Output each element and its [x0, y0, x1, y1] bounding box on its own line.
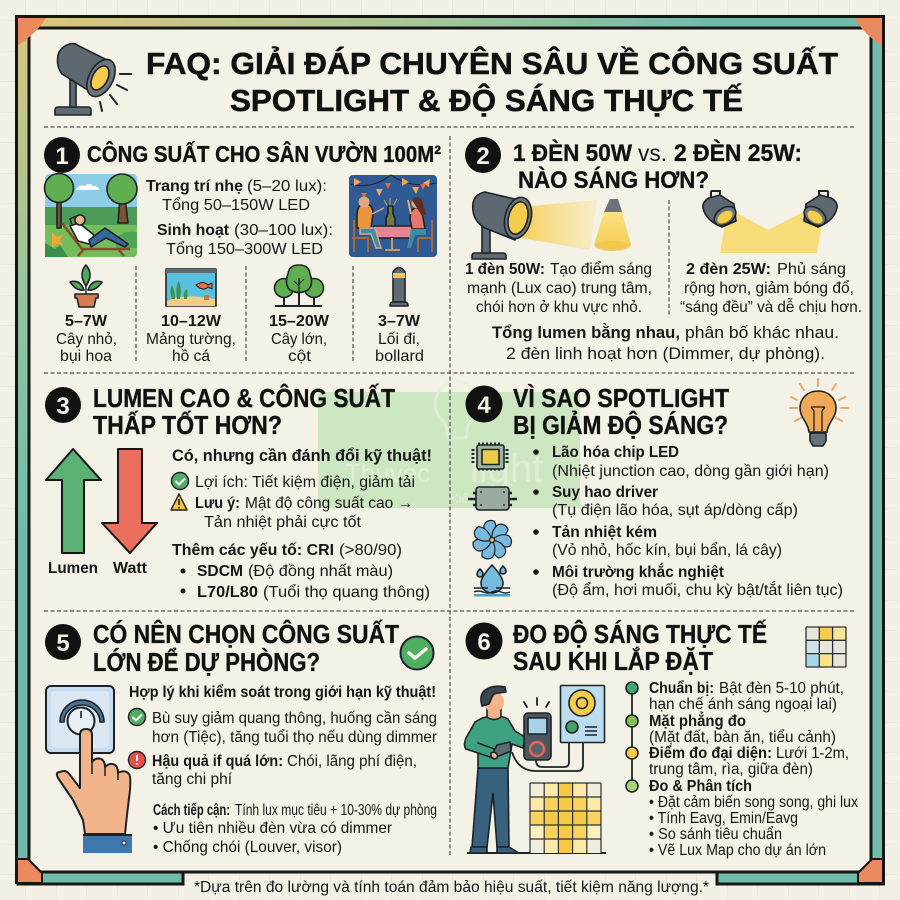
panel: 1 đèn 50W vs 2 đèn 25W	[465, 137, 862, 363]
badge 3: 3	[56, 393, 70, 420]
caution row: Lưu ý:	[195, 495, 240, 512]
illustration: garden relaxing	[44, 174, 137, 257]
step: measuring points: Điểm đo đại diện:	[649, 745, 772, 762]
illustration: focused cone	[594, 199, 631, 251]
badge 4: 4	[477, 392, 491, 419]
badge 5	[45, 624, 81, 660]
text: living use: (30–100 lux):	[234, 222, 333, 239]
step: measure and analyse: • Tính Eavg, Emin/Eavg	[649, 810, 798, 827]
title: SPOTLIGHT & ĐỘ SÁNG THỰC TẾ	[230, 82, 743, 118]
heading 4	[513, 384, 729, 440]
heading 4: BỊ GIẢM ĐỘ SÁNG?	[513, 410, 728, 440]
icon: water drop	[474, 565, 510, 596]
item: wall and aquarium: Mảng tường,	[146, 331, 236, 348]
text: 2 đèn 25W: “sáng đều” và dễ chịu hơn.	[680, 297, 862, 316]
heading 6	[513, 619, 767, 676]
badge 1	[44, 137, 80, 173]
heading 3: LUMEN CAO & CÔNG SUẤT	[93, 383, 395, 413]
panel: công suất cho sân vườn	[44, 137, 441, 365]
heading 3	[93, 383, 395, 440]
text: light decorative	[146, 178, 327, 214]
icon: header spotlight	[55, 44, 131, 115]
heading 2: NÀO SÁNG HƠN?	[518, 166, 709, 194]
panel: vì sao spotlight giảm độ sáng	[466, 379, 848, 599]
badge 3	[45, 387, 81, 423]
text: 2 đèn 25W	[680, 261, 862, 316]
heading 6: SAU KHI LẮP ĐẶT	[513, 646, 713, 676]
step: measuring plane: Mặt phẳng đo	[649, 712, 746, 730]
benefit row	[128, 708, 438, 746]
badge 6	[466, 622, 502, 660]
illustration: party dining	[349, 175, 437, 257]
watt column dividers	[136, 266, 353, 363]
heading 2: 1 ĐÈN 50W	[513, 139, 632, 167]
title: FAQ: GIẢI ĐÁP CHUYÊN SÂU VỀ CÔNG SUẤT	[146, 45, 838, 81]
heading 6: ĐO ĐỘ SÁNG THỰC TẾ	[513, 619, 767, 649]
title	[146, 45, 838, 118]
subheading: Có, nhưng cần đánh đổi kỹ thuật!	[172, 446, 432, 465]
extra factors list: (>80/90)	[339, 542, 402, 559]
badge 2	[465, 137, 501, 173]
watermark	[318, 382, 580, 508]
item: pathway bollard: 3–7W	[378, 313, 421, 330]
icon: red watt arrow	[102, 449, 157, 577]
approach list: Cách tiếp cận:	[153, 802, 230, 819]
reason: driver loss: Suy hao driver	[552, 484, 658, 501]
item: pathway bollard: Lối đi,	[378, 331, 420, 348]
item: pathway bollard: bollard	[375, 348, 424, 365]
illustration: dimmer and hand	[46, 686, 132, 853]
icon: driver	[468, 487, 517, 510]
step: preparation: Bật đèn 5-10 phút,	[719, 680, 844, 697]
step: measuring points: trung tâm, rìa, giữa đèn)	[649, 761, 813, 778]
step: measuring points	[649, 745, 849, 778]
text: light decorative: (5–20 lux):	[247, 178, 327, 195]
panel: lumen cao và công suất thấp	[45, 383, 432, 601]
heading 5	[93, 619, 399, 677]
text: 1 đèn 50W: chói hơn ở khu vực nhỏ.	[476, 299, 642, 316]
item: pathway bollard	[375, 268, 424, 365]
panel: có nên chọn công suất lớn	[45, 619, 438, 856]
heading 3: THẤP TỐT HƠN?	[93, 410, 282, 440]
extra factors list: (Tuổi thọ quang thông)	[263, 583, 430, 601]
text: 1 đèn 50W: mạnh (Lux cao) trung tâm,	[467, 280, 652, 297]
reason: poor heat dissipation	[533, 524, 782, 559]
extra factors list	[172, 542, 430, 601]
icon: lux grid	[806, 627, 846, 667]
reason: driver loss	[533, 484, 798, 519]
illustration: two 25W spotlights	[703, 191, 837, 253]
badge 5: 5	[56, 630, 70, 657]
heading 2	[513, 139, 802, 194]
text: light decorative: Tổng 50–150W LED	[162, 196, 310, 214]
reason: harsh environment	[533, 562, 843, 599]
heading 5: LỚN ĐỂ DỰ PHÒNG?	[93, 647, 320, 677]
reason: harsh environment: (Độ ẩm, hơi muối, chu kỳ bật/tắt liên tục)	[552, 580, 843, 599]
extra factors list: (Độ đồng nhất màu)	[248, 563, 393, 580]
item: small plants: bụi hoa	[60, 348, 112, 365]
reason: poor heat dissipation: Tản nhiệt kém	[552, 524, 657, 541]
summary text: Tổng lumen bằng nhau,	[492, 323, 680, 342]
panel: đo độ sáng thực tế	[464, 619, 858, 859]
badge 1: 1	[55, 143, 69, 170]
badge 6: 6	[477, 629, 491, 656]
illustration: technician with lux meter	[464, 686, 606, 853]
item: small plants	[56, 265, 117, 365]
caution row	[171, 494, 413, 531]
icon: green lumen arrow: Lumen	[48, 560, 98, 577]
text: living use: Sinh hoạt	[157, 222, 230, 239]
item: small plants: Cây nhỏ,	[56, 331, 117, 348]
step: measure and analyse: • Đặt cảm biến song song, ghi lux	[649, 794, 858, 811]
item: wall and aquarium	[146, 269, 236, 365]
reason: LED chip aging: Lão hóa chip LED	[552, 444, 679, 461]
step: preparation: Chuẩn bị:	[649, 680, 714, 697]
step: measuring plane	[649, 712, 836, 746]
text: 2 đèn 25W: Phủ sáng	[777, 261, 846, 278]
item: wall and aquarium: hồ cá	[172, 348, 210, 365]
item: large trees	[269, 265, 330, 365]
step: measure and analyse: • So sánh tiêu chuẩn	[649, 826, 782, 843]
item: large trees: 15–20W	[269, 313, 330, 330]
step: measure and analyse	[649, 778, 858, 859]
icon: red watt arrow: Watt	[113, 560, 148, 577]
step: preparation	[649, 680, 844, 713]
caution row: Mật độ công suất cao →	[245, 495, 413, 512]
consequence row: Chói, lãng phí điện,	[287, 753, 417, 770]
text: light decorative: Trang trí nhẹ	[146, 178, 243, 195]
step: measure and analyse: • Vẽ Lux Map cho dự án lớn	[649, 842, 826, 859]
reason: LED chip aging	[533, 444, 829, 480]
icon: large check	[400, 636, 434, 670]
extra factors list: SDCM	[197, 563, 243, 580]
benefit row: Lợi ích: Tiết kiệm điện, giảm tải	[195, 474, 415, 491]
step: measuring plane: (Mặt đất, bàn ăn, tiểu cảnh)	[649, 729, 836, 746]
caution row: Tản nhiệt phải cực tốt	[204, 514, 362, 531]
summary text: phân bố khác nhau.	[685, 323, 839, 342]
watermark: light	[470, 447, 543, 491]
summary text	[492, 323, 839, 363]
badge 2: 2	[476, 143, 490, 170]
benefit row: Bù suy giảm quang thông, huống cần sáng	[152, 710, 437, 727]
reason: harsh environment: Môi trường khắc nghiệt	[552, 562, 725, 581]
illustration: single 50W spotlight beam	[472, 192, 597, 259]
badge 4	[466, 386, 502, 422]
approach list	[153, 802, 437, 856]
item: wall and aquarium: 10–12W	[161, 313, 222, 330]
step: measuring points: Lưới 1-2m,	[776, 745, 849, 762]
divider	[668, 200, 670, 315]
heading 4: VÌ SAO SPOTLIGHT	[513, 384, 729, 413]
dividers	[44, 127, 855, 855]
consequence row: Hậu quả if quá lớn:	[152, 753, 283, 770]
text: 2 đèn 25W: rộng hơn, giảm bóng đổ,	[684, 279, 854, 297]
watermark: Thuvec	[345, 458, 430, 488]
heading 2: 2 ĐÈN 25W:	[674, 139, 802, 167]
reason: LED chip aging: (Nhiệt junction cao, dòng gần giới hạn)	[552, 463, 829, 480]
icon: LED chip	[473, 444, 507, 469]
approach list: • Ưu tiên nhiều đèn vừa có dimmer	[153, 820, 393, 837]
consequence row: tăng chi phí	[152, 771, 233, 788]
text: living use	[157, 222, 333, 258]
icon: green lumen arrow	[46, 449, 101, 577]
text: 1 đèn 50W: 1 đèn 50W:	[465, 261, 545, 278]
consequence row	[128, 752, 417, 788]
heading 1: CÔNG SUẤT CHO SÂN VƯỜN 100M²	[87, 140, 441, 167]
reason: poor heat dissipation: (Vỏ nhỏ, hốc kín, bụi bẩn, lá cây)	[552, 541, 782, 559]
benefit row: hơn (Tiệc), tăng tuổi thọ nếu dùng dimmer	[152, 728, 438, 746]
icon: cooling fan	[472, 520, 513, 561]
item: large trees: Cây lớn,	[271, 331, 327, 348]
subheading: Hợp lý khi kiểm soát trong giới hạn kỹ thuật!	[129, 683, 436, 701]
approach list: • Chống chói (Louver, visor)	[153, 839, 342, 856]
footer note: *Dựa trên đo lường và tính toán đảm bảo hiệu suất, tiết kiệm năng lượng.*	[194, 879, 709, 896]
timeline	[626, 682, 638, 792]
extra factors list: Thêm các yếu tố: CRI	[172, 542, 334, 559]
text: 2 đèn 25W: 2 đèn 25W:	[686, 261, 771, 278]
item: small plants: 5–7W	[65, 313, 108, 330]
text: 1 đèn 50W: Tạo điểm sáng	[550, 260, 652, 278]
watermark: Kiến thức	[450, 491, 506, 506]
item: large trees: cột	[288, 348, 312, 365]
icon: light bulb	[790, 379, 848, 446]
illustration: lux map floor grid	[530, 783, 601, 853]
approach list: Tính lux mục tiêu + 10-30% dự phòng	[235, 802, 437, 819]
heading 2: vs.	[638, 140, 667, 166]
extra factors list: L70/L80	[197, 584, 258, 601]
reason: driver loss: (Tụ điện lão hóa, sụt áp/dòng cấp)	[552, 502, 798, 519]
step: measure and analyse: Đo & Phân tích	[649, 778, 752, 795]
text: 1 đèn 50W	[465, 260, 652, 316]
heading 5: CÓ NÊN CHỌN CÔNG SUẤT	[93, 619, 399, 649]
text: living use: Tổng 150–300W LED	[166, 240, 323, 258]
summary text: 2 đèn linh hoạt hơn (Dimmer, dự phòng).	[506, 344, 825, 363]
step: preparation: hạn chế ánh sáng ngoại lai)	[649, 696, 837, 713]
